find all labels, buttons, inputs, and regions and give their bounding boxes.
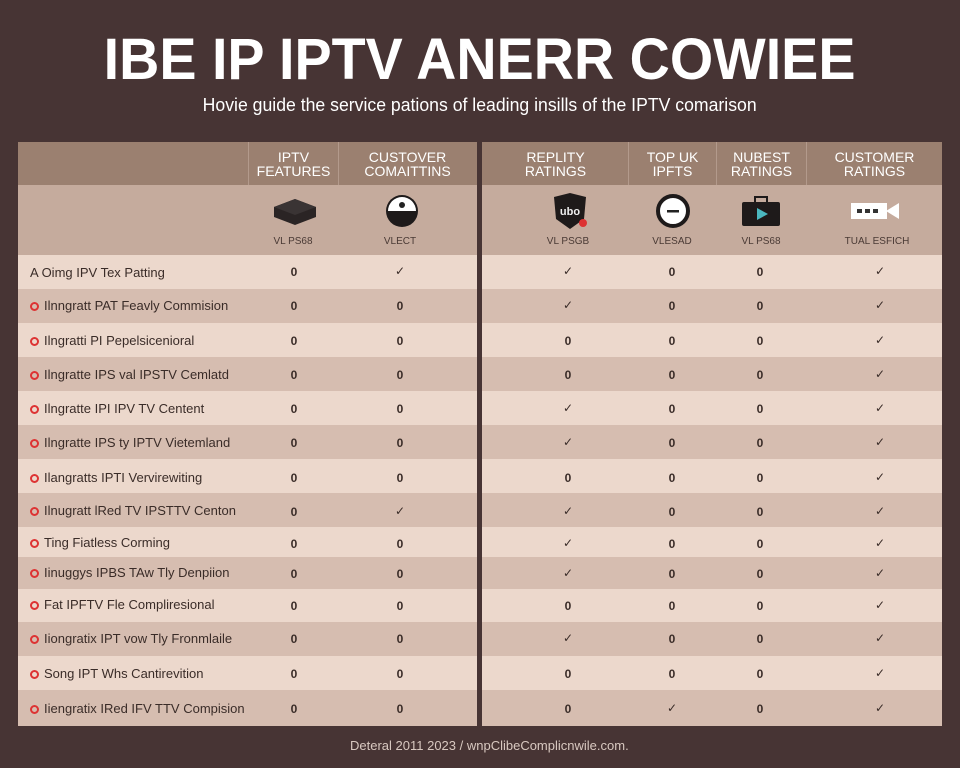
table values: 0 xyxy=(757,436,763,450)
table values: 0 xyxy=(757,632,763,646)
table values: 0 xyxy=(291,567,297,581)
table rows: Iiongratix IPT vow Tly Fronmlaile xyxy=(44,631,232,646)
table values: 0 xyxy=(669,471,675,485)
table rows: Ting Fiatless Corming xyxy=(44,535,170,550)
table rows: Iinuggys IPBS TAw Tly Denpiion xyxy=(44,565,229,580)
table values: 0 xyxy=(291,702,297,716)
icon labels: VLECT xyxy=(384,236,416,247)
table values: 0 xyxy=(757,471,763,485)
table values: 0 xyxy=(291,402,297,416)
table rows: Ilnngratt PAT Feavly Commision xyxy=(44,298,228,313)
divider between table halves xyxy=(477,142,482,726)
table values: ✓ xyxy=(875,470,885,484)
table values: 0 xyxy=(669,632,675,646)
table values: ✓ xyxy=(875,435,885,449)
table values: 0 xyxy=(669,368,675,382)
column headers: COMAITTINS xyxy=(364,162,451,178)
table values: 0 xyxy=(669,334,675,348)
table values: ✓ xyxy=(395,504,405,518)
table values: 0 xyxy=(565,471,571,485)
icon labels xyxy=(273,236,909,247)
table values: 0 xyxy=(397,667,403,681)
subtitle: Hovie guide the service pations of leading insills of the IPTV comarison xyxy=(203,95,757,115)
icon: clock xyxy=(656,194,690,228)
table values: ✓ xyxy=(563,435,573,449)
table values: 0 xyxy=(397,436,403,450)
table values: 0 xyxy=(669,505,675,519)
table values: 0 xyxy=(397,537,403,551)
table values: ✓ xyxy=(875,566,885,580)
table values: 0 xyxy=(565,667,571,681)
table values: 0 xyxy=(397,632,403,646)
column headers: RATINGS xyxy=(844,162,905,178)
table values: 0 xyxy=(669,667,675,681)
column headers: TOP UK xyxy=(647,148,698,164)
column headers: IPTV xyxy=(278,148,309,164)
table values: 0 xyxy=(669,402,675,416)
table values: 0 xyxy=(397,368,403,382)
table values: 0 xyxy=(291,299,297,313)
column headers: NUBEST xyxy=(733,148,790,164)
table values: ✓ xyxy=(563,298,573,312)
table values: 0 xyxy=(291,471,297,485)
table values: 0 xyxy=(397,471,403,485)
table values: ✓ xyxy=(875,264,885,278)
table values: ✓ xyxy=(563,504,573,518)
column headers: RATINGS xyxy=(731,162,792,178)
table values: 0 xyxy=(397,702,403,716)
table values: 0 xyxy=(291,667,297,681)
table values: 0 xyxy=(757,299,763,313)
column headers: RATINGS xyxy=(525,162,586,178)
column headers: IPFTS xyxy=(653,162,692,178)
table values: 0 xyxy=(757,667,763,681)
table values: 0 xyxy=(669,599,675,613)
panel: comparison table xyxy=(18,142,942,726)
table values: 0 xyxy=(291,505,297,519)
table values: 0 xyxy=(397,299,403,313)
table values: ✓ xyxy=(875,666,885,680)
table values: 0 xyxy=(757,505,763,519)
table rows: Fat IPFTV Fle Compliresional xyxy=(44,597,214,612)
table values: 0 xyxy=(669,299,675,313)
table values: ✓ xyxy=(875,598,885,612)
footer: Deteral 2011 2023 / wnpClibeComplicnwile.com. xyxy=(350,738,629,753)
table values: 0 xyxy=(669,567,675,581)
table values: 0 xyxy=(291,537,297,551)
table values: 0 xyxy=(757,702,763,716)
table values: ✓ xyxy=(875,701,885,715)
column headers: FEATURES xyxy=(257,162,330,178)
icons row xyxy=(274,193,899,229)
table values: 0 xyxy=(291,632,297,646)
table values: 0 xyxy=(757,599,763,613)
icon labels: VL PS68 xyxy=(741,236,781,247)
table values: 0 xyxy=(669,436,675,450)
table values: ✓ xyxy=(875,504,885,518)
icon: video camera xyxy=(851,203,899,219)
table values: 0 xyxy=(757,567,763,581)
table values: ✓ xyxy=(395,264,405,278)
table rows: Ilngratte IPI IPV TV Centent xyxy=(44,401,204,416)
table rows: Ilngratte IPS val IPSTV Cemlatd xyxy=(44,367,229,382)
table values: 0 xyxy=(565,702,571,716)
table values: 0 xyxy=(565,334,571,348)
icon: play briefcase xyxy=(742,196,780,226)
table values: ✓ xyxy=(563,566,573,580)
column headers: REPLITY xyxy=(526,148,585,164)
table values: ✓ xyxy=(563,401,573,415)
table values: 0 xyxy=(669,537,675,551)
table values: ✓ xyxy=(875,333,885,347)
table rows: A Oimg IPV Tex Patting xyxy=(30,265,165,280)
table values: 0 xyxy=(565,599,571,613)
table values: 0 xyxy=(757,265,763,279)
table values: ✓ xyxy=(875,298,885,312)
table values: 0 xyxy=(669,265,675,279)
table values: 0 xyxy=(757,537,763,551)
table rows: Ilngratte IPS ty IPTV Vietemland xyxy=(44,435,230,450)
table values: 0 xyxy=(291,334,297,348)
column headers: CUSTOMER xyxy=(835,148,914,164)
table values: ✓ xyxy=(875,631,885,645)
table values: 0 xyxy=(291,368,297,382)
table values: 0 xyxy=(291,436,297,450)
table values: 0 xyxy=(397,599,403,613)
title: IBE IP IPTV ANERR COWIEE xyxy=(104,27,856,92)
icon: set-top box xyxy=(274,199,316,225)
icon labels: VL PS68 xyxy=(273,236,313,247)
icon: shield badge: ubo xyxy=(560,206,580,218)
table values: ✓ xyxy=(563,536,573,550)
table values: ✓ xyxy=(875,536,885,550)
table values: 0 xyxy=(565,368,571,382)
table values: ✓ xyxy=(563,264,573,278)
icon: shield badge xyxy=(554,193,587,229)
table values: 0 xyxy=(291,265,297,279)
table values: 0 xyxy=(397,334,403,348)
table values: 0 xyxy=(757,402,763,416)
table rows: Ilnugratt lRed TV IPSTTV Centon xyxy=(44,503,236,518)
column headers xyxy=(248,142,914,185)
table values: ✓ xyxy=(875,367,885,381)
column headers: CUSTOVER xyxy=(369,148,446,164)
table rows: Ilangratts IPTI Vervirewiting xyxy=(44,470,202,485)
table rows: Song IPT Whs Cantirevition xyxy=(44,666,203,681)
table values: 0 xyxy=(397,567,403,581)
table values: ✓ xyxy=(667,701,677,715)
icon: remote dial xyxy=(386,195,418,227)
table rows: Ilngratti PI Pepelsicenioral xyxy=(44,333,194,348)
table values: 0 xyxy=(757,334,763,348)
icon labels: TUAL ESFICH xyxy=(845,236,909,247)
table values: 0 xyxy=(291,599,297,613)
table rows: Iiengratix IRed IFV TTV Compision xyxy=(44,701,245,716)
table values: 0 xyxy=(757,368,763,382)
table values: ✓ xyxy=(875,401,885,415)
icon labels: VLESAD xyxy=(652,236,692,247)
table values: 0 xyxy=(397,402,403,416)
table values: ✓ xyxy=(563,631,573,645)
icon labels: VL PSGB xyxy=(547,236,589,247)
